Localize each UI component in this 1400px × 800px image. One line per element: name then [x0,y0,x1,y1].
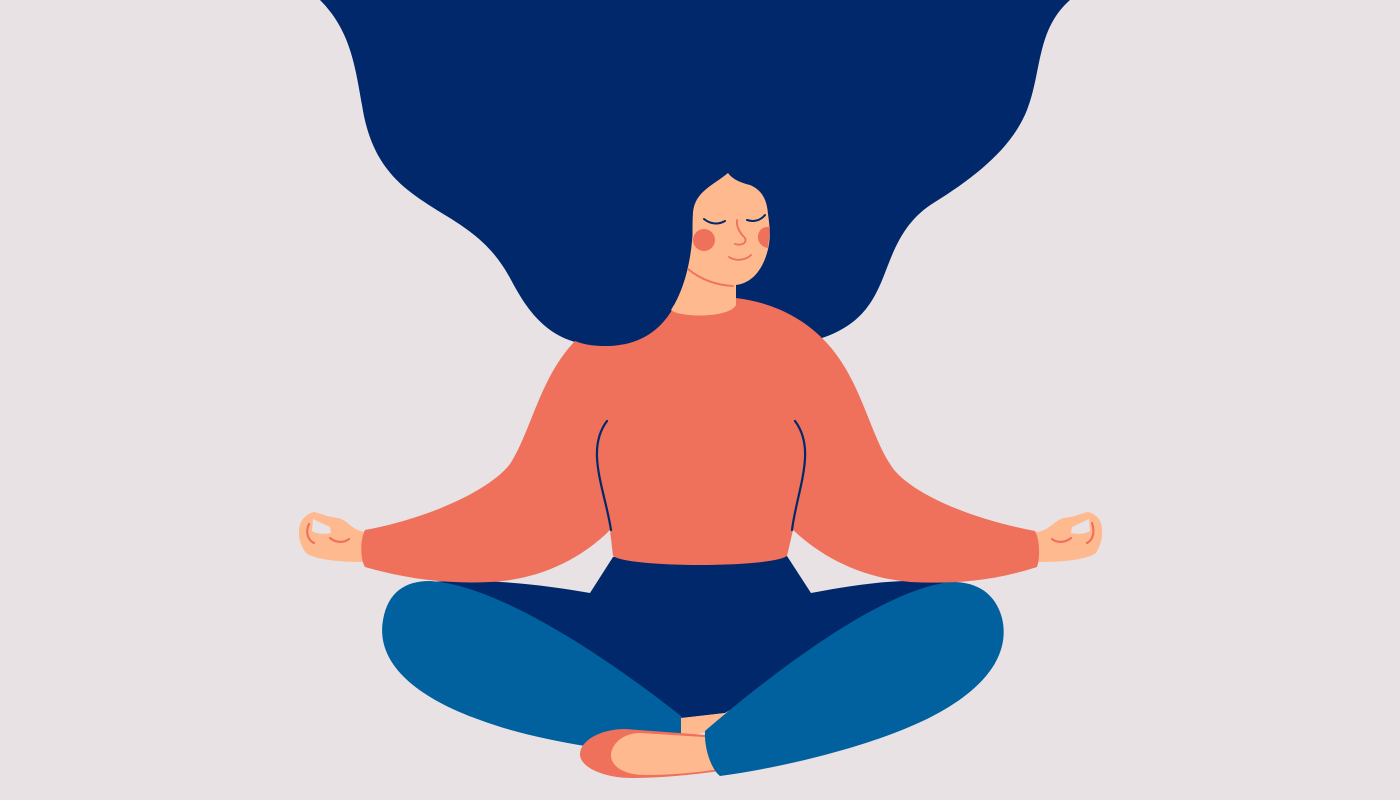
leg: right [705,582,1004,776]
face [692,173,770,285]
shoe and foot [580,729,720,778]
neck line [688,269,733,286]
ankle [681,713,726,738]
hand: left [299,512,366,562]
hair: flowing mass behind body [320,0,1070,346]
leg: left [382,581,681,746]
hand: right [1036,512,1102,562]
hair: front lobe over shoulder [560,200,700,346]
sweater [361,298,1039,583]
trousers: dark waist and thighs [430,556,950,718]
neck [671,225,736,315]
